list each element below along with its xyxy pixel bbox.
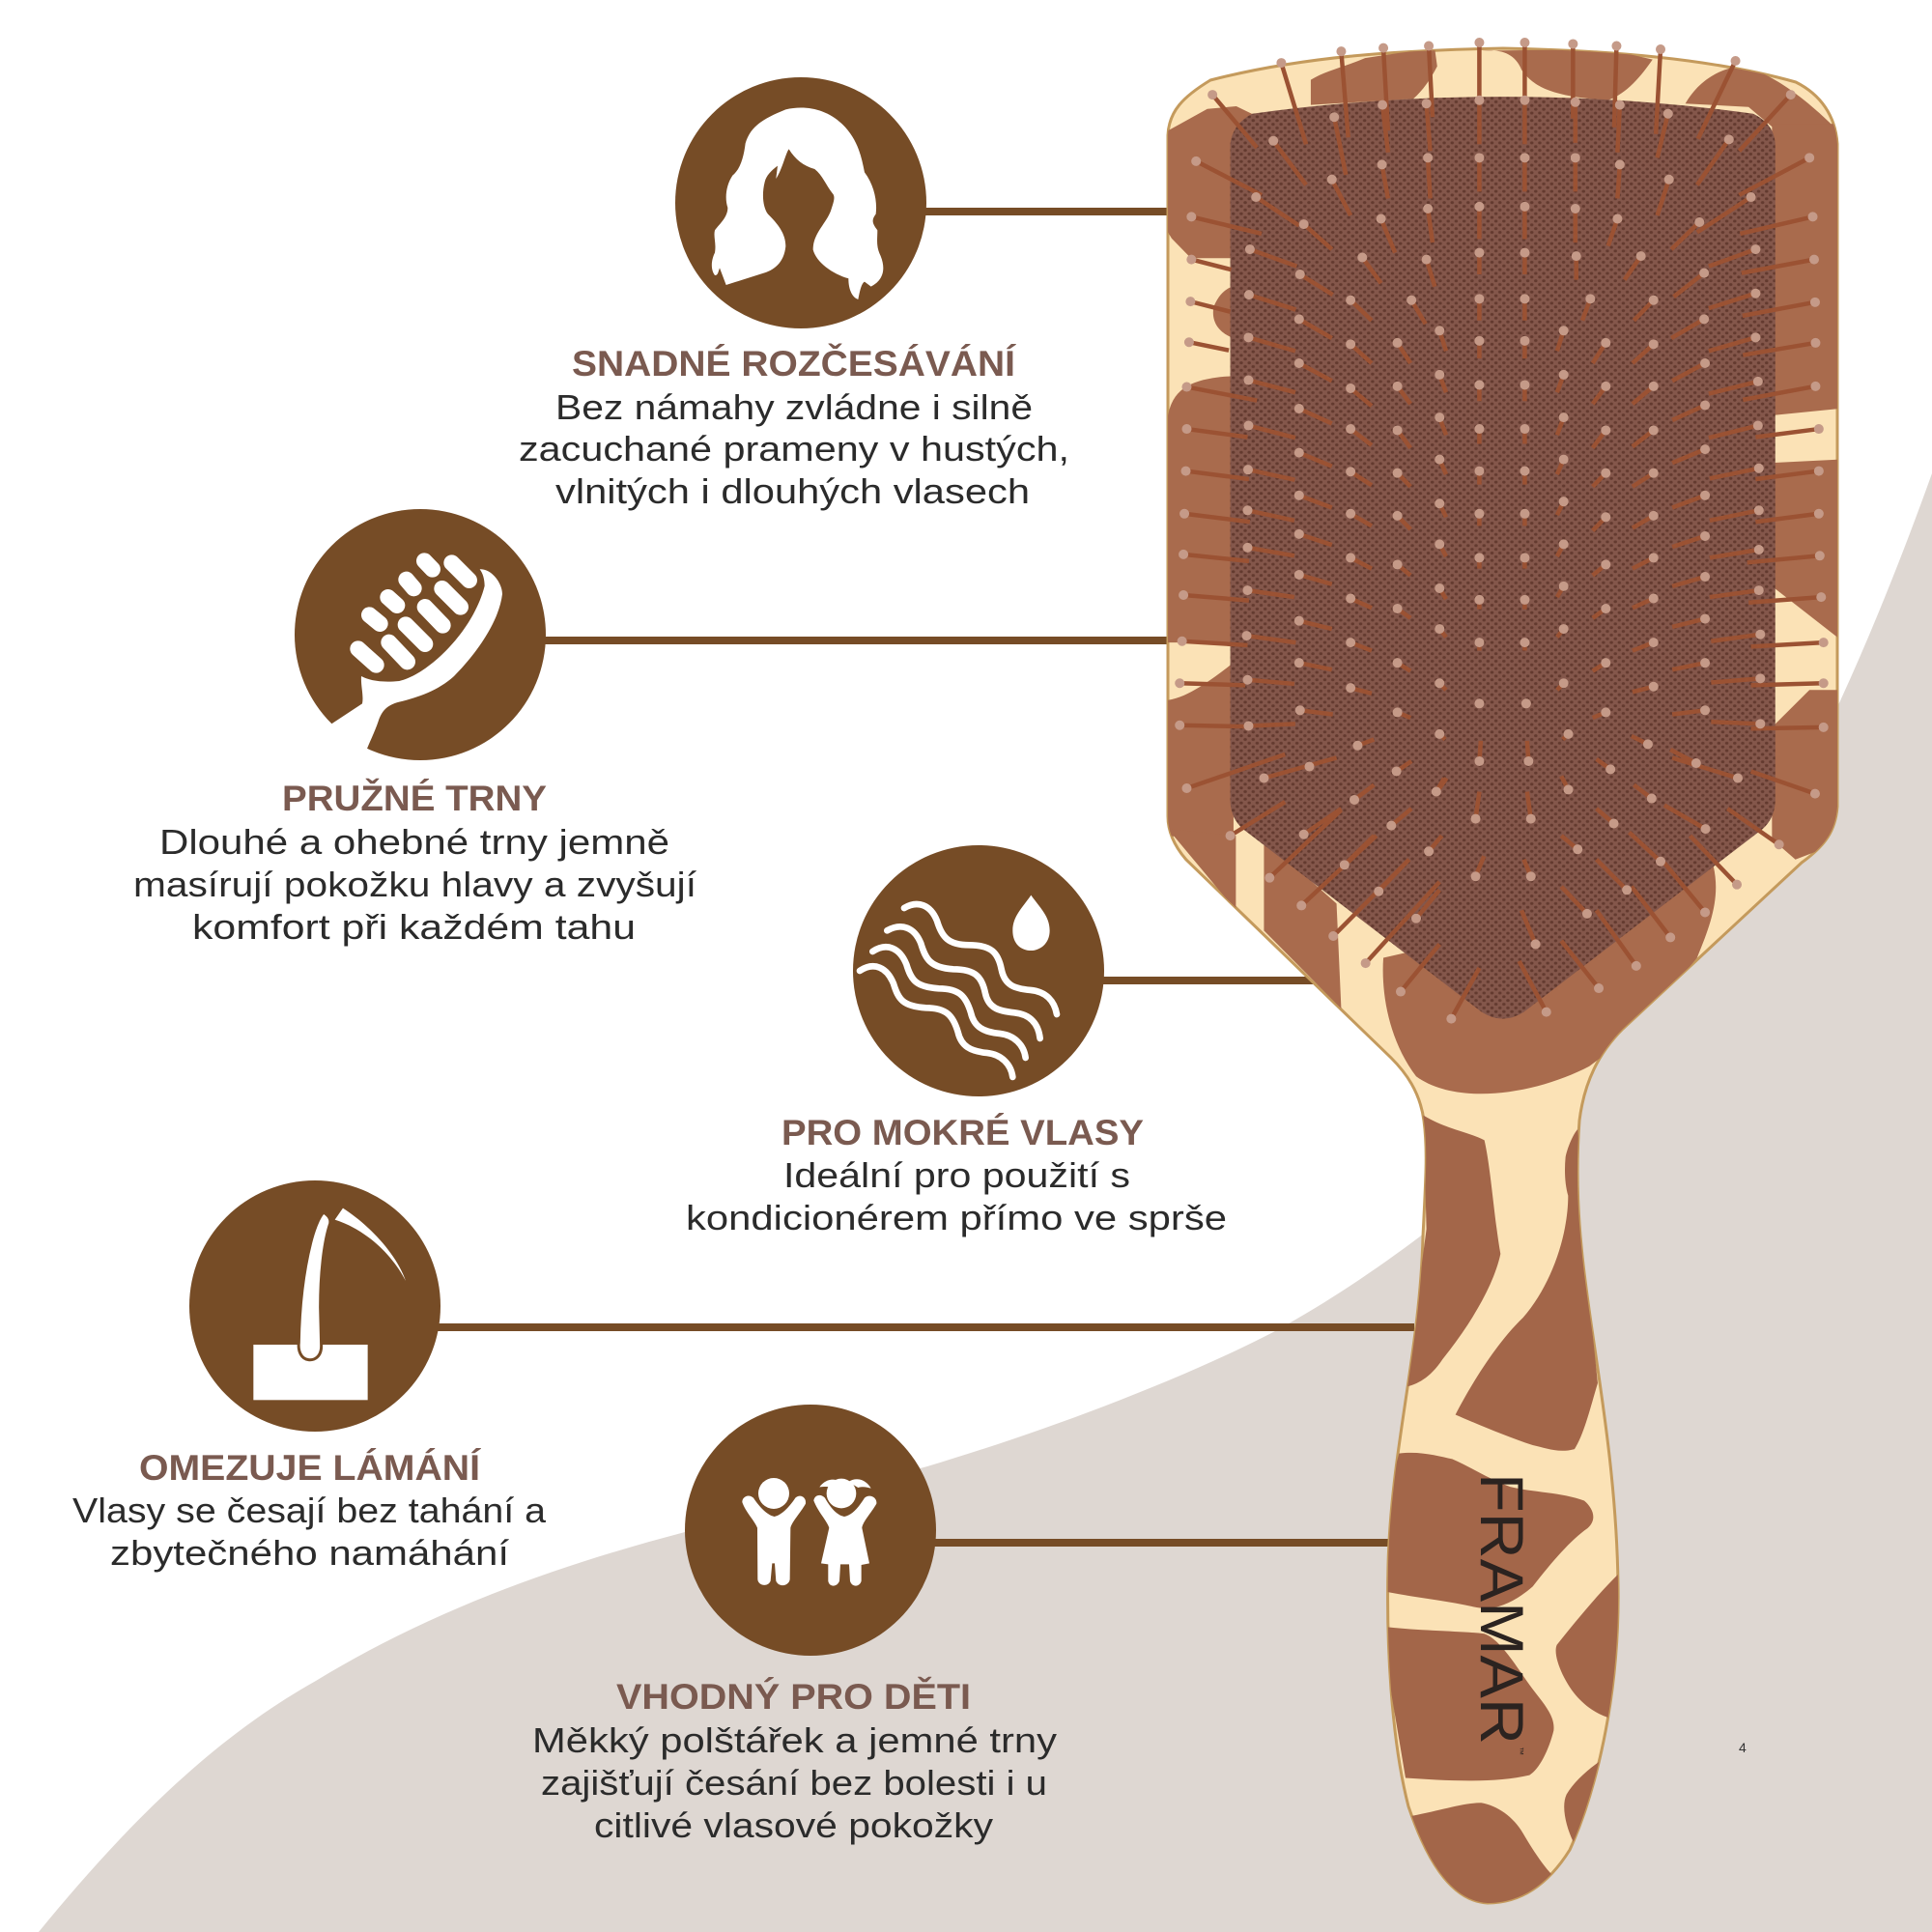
heading: VHODNÝ PRO DĚTI — [616, 1676, 971, 1717]
description — [72, 1491, 547, 1573]
description: Bez námahy zvládne i silně — [555, 387, 1033, 427]
feature: vhodný pro děti — [532, 1405, 1057, 1845]
description: Vlasy se česají bez tahání a — [72, 1491, 547, 1530]
description — [532, 1720, 1057, 1845]
hair brush illustration — [1168, 43, 1840, 1932]
icon: woman with wavy hair — [675, 77, 926, 328]
description: kondicionérem přímo ve sprše — [686, 1198, 1227, 1237]
description: zacuchané prameny v hustých, — [519, 429, 1069, 469]
brand logo: FRAMAR — [1467, 1473, 1535, 1745]
description: zajišťují česání bez bolesti i u — [541, 1763, 1047, 1803]
icon: boy and girl — [685, 1405, 936, 1656]
description: citlivé vlasové pokožky — [594, 1805, 993, 1845]
description: Měkký polštářek a jemné trny — [532, 1720, 1057, 1760]
feature: omezuje lámání — [72, 1180, 547, 1573]
description: Dlouhé a ohebné trny jemně — [159, 822, 669, 862]
head giraffe spots — [1168, 49, 1840, 1094]
description — [133, 822, 696, 947]
description: vlnitých i dlouhých vlasech — [555, 471, 1030, 511]
page number: 4 — [1739, 1740, 1747, 1755]
brand logo: ™ — [1516, 1747, 1525, 1755]
brush pins heads — [1179, 43, 1824, 1019]
description — [686, 1155, 1227, 1237]
heading: PRUŽNÉ TRNY — [282, 778, 547, 818]
description — [519, 387, 1069, 511]
description: masírují pokožku hlavy a zvyšují — [133, 865, 696, 904]
icon: wet hair waves and drop — [853, 845, 1104, 1096]
head mesh pad and pins — [1179, 43, 1824, 1019]
feature: pružné trny — [133, 509, 696, 947]
icon: broken hair strand — [189, 1180, 440, 1432]
heading: PRO MOKRÉ VLASY — [781, 1113, 1144, 1152]
feature: pro mokré vlasy — [686, 845, 1227, 1237]
description: Ideální pro použití s — [783, 1155, 1130, 1195]
description: zbytečného namáhání — [110, 1533, 509, 1573]
handle giraffe spots — [1388, 1116, 1620, 1932]
connector lines — [435, 212, 1414, 1543]
feature: snadné rozčesávání — [519, 77, 1069, 511]
brush pins stems — [1179, 43, 1824, 1019]
description: komfort při každém tahu — [192, 907, 636, 947]
background swoosh — [39, 473, 1932, 1932]
heading: OMEZUJE LÁMÁNÍ — [139, 1448, 482, 1488]
icon: flexible bristles — [295, 509, 546, 760]
heading: SNADNÉ ROZČESÁVÁNÍ — [572, 343, 1017, 384]
